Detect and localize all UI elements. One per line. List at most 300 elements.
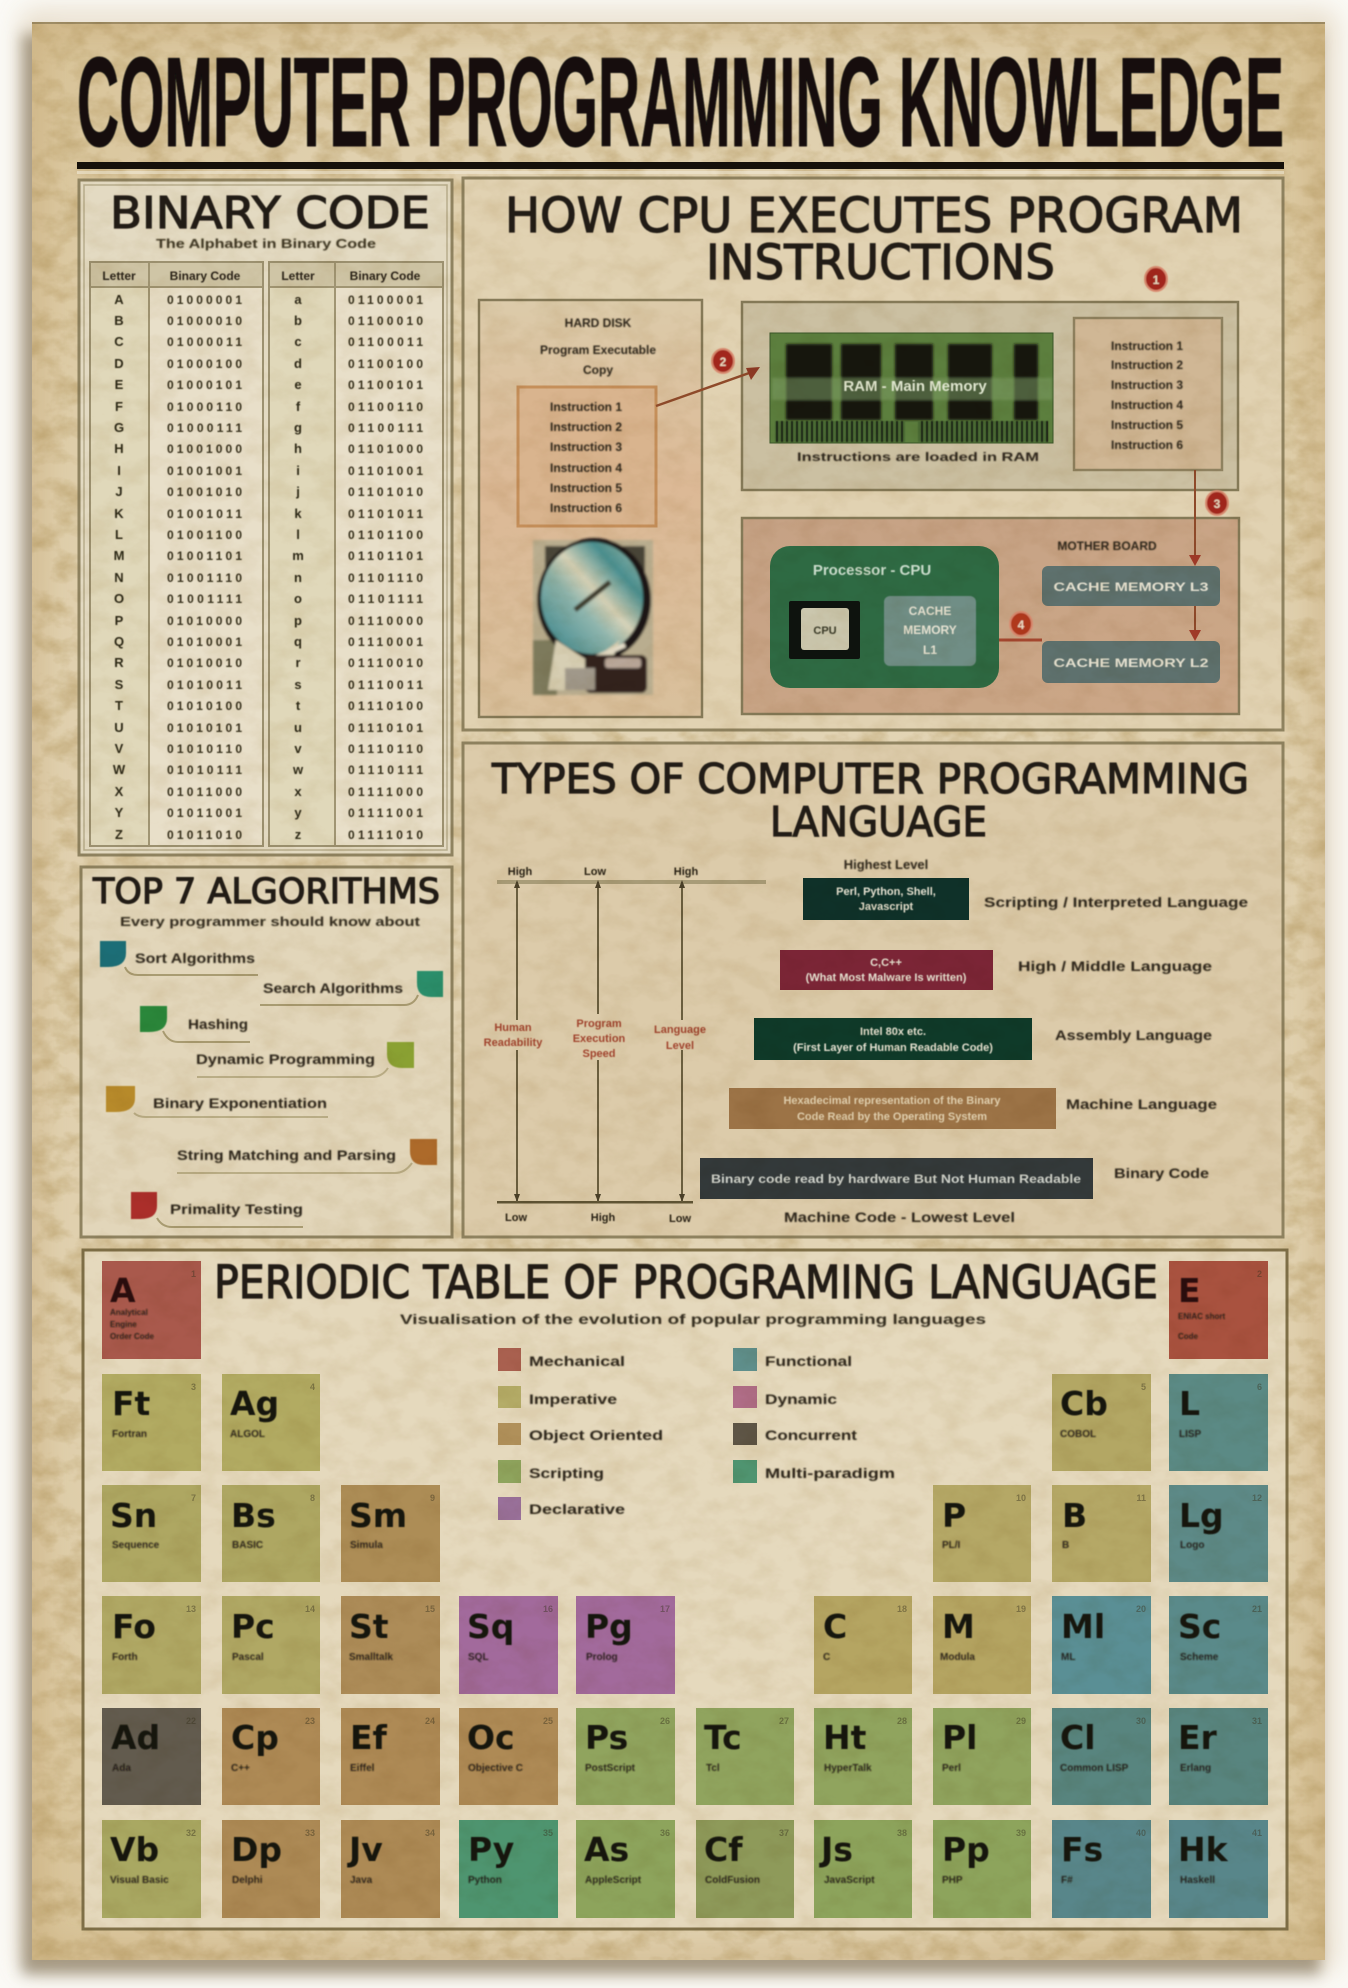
table: lowercase letters: 01100100 [348, 357, 423, 371]
element Cl: 30 [1136, 1716, 1146, 1726]
bar: assembly language: Intel 80x etc. [860, 1026, 926, 1038]
element L: 6 [1257, 1382, 1262, 1392]
bar: binary code: Binary code read by hardware But Not Human Readable [711, 1172, 1081, 1186]
table: uppercase letters: W [113, 762, 126, 777]
element A: 1 [191, 1269, 196, 1279]
table: uppercase letters: Binary Code [170, 269, 241, 283]
table: lowercase letters: 01110111 [348, 763, 423, 777]
processor block: Processor - CPU [813, 562, 931, 579]
element Oc: Oc [467, 1718, 515, 1757]
label: highest level: Highest Level [844, 857, 928, 872]
table: lowercase letters: i [296, 463, 300, 478]
element Ml [1052, 1596, 1151, 1694]
table: uppercase letters: 01010100 [167, 699, 242, 713]
element E: E [1178, 1271, 1201, 1310]
table: lowercase letters: Binary Code [350, 269, 421, 283]
table: uppercase letters: 01011000 [167, 785, 242, 799]
element Sq: 16 [543, 1604, 553, 1614]
hard disk labels [540, 316, 656, 377]
table: lowercase letters: 01100101 [348, 378, 423, 392]
table: uppercase letters: 01010111 [167, 763, 242, 777]
table: uppercase letters: O [114, 591, 124, 606]
table: lowercase letters: 01111000 [348, 785, 423, 799]
element Ht [814, 1708, 912, 1805]
axis label: language level: Language [654, 1024, 706, 1036]
element Tc [696, 1708, 794, 1805]
program instruction list: Instruction 6 [550, 501, 622, 515]
table: lowercase letters: 01100010 [348, 314, 423, 328]
heading: how CPU executes: HOW CPU EXECUTES PROGRAM [505, 188, 1243, 244]
table: uppercase letters: D [114, 356, 124, 371]
table: uppercase letters: P [115, 613, 124, 628]
element Cp [222, 1708, 320, 1805]
legend [498, 1348, 895, 1520]
element Jv [341, 1820, 440, 1918]
element Cl: Common LISP [1060, 1763, 1129, 1774]
element Cp: Cp [231, 1718, 279, 1757]
table: uppercase letters: 01011001 [167, 806, 242, 820]
element L: LISP [1179, 1429, 1202, 1440]
bar: binary code [700, 1158, 1209, 1199]
hard disk labels: Program Executable [540, 343, 656, 357]
element Py: 35 [543, 1828, 553, 1838]
element Pp [933, 1820, 1031, 1918]
table: uppercase letters: 01010011 [167, 678, 242, 692]
element As: 36 [660, 1828, 670, 1838]
element A: A [110, 1271, 136, 1310]
bar: assembly language [754, 1018, 1212, 1060]
motherboard label: MOTHER BOARD [1057, 539, 1157, 553]
element Jv: Java [350, 1875, 373, 1886]
element B: B [1062, 1540, 1069, 1551]
axes chart: Low [584, 866, 606, 878]
axes chart [484, 866, 766, 1225]
element A: Order Code [110, 1332, 155, 1341]
axes chart: Low [669, 1213, 691, 1225]
table: uppercase letters: 01001011 [167, 507, 242, 521]
element C: C [823, 1607, 847, 1646]
axis label: program execution speed: Execution [573, 1033, 626, 1045]
algorithm 3: Hashing [188, 1016, 248, 1032]
element As: As [584, 1830, 629, 1869]
element Jv: 34 [425, 1828, 435, 1838]
subheading: periodic table: Visualisation of the evolution of popular programming languages [400, 1311, 986, 1327]
element C: C [823, 1652, 830, 1663]
heading: types of programming language: LANGUAGE [770, 798, 987, 846]
table: uppercase letters: N [114, 570, 124, 585]
element B [1052, 1485, 1151, 1582]
bar: scripting language: Scripting / Interpreted Language [984, 894, 1248, 910]
element P [933, 1485, 1031, 1582]
element Cf [696, 1820, 794, 1918]
element E: Code [1178, 1332, 1199, 1341]
heading: types of programming language: TYPES OF COMPUTER PROGRAMMING [491, 755, 1249, 803]
step badge 4 [1010, 612, 1032, 636]
element Ht: HyperTalk [824, 1763, 872, 1774]
heading: periodic table: PERIODIC TABLE OF PROGRAMING LANGUAGE [214, 1256, 1158, 1309]
element Ad: Ada [112, 1763, 131, 1774]
element Fo: Fo [112, 1607, 156, 1646]
cache memory L1: MEMORY [903, 623, 957, 637]
element Ft: Fortran [112, 1429, 147, 1440]
element Sm: Sm [349, 1496, 407, 1535]
table: lowercase letters: w [292, 762, 304, 777]
table: uppercase letters: L [115, 527, 123, 542]
table: uppercase letters: 01010010 [167, 656, 242, 670]
table: uppercase letters: 01001010 [167, 485, 242, 499]
element Fo: Forth [112, 1652, 138, 1663]
element Vb [102, 1820, 201, 1918]
icon: RAM module: RAM - Main Memory [843, 378, 987, 395]
axes chart: High [508, 866, 532, 878]
table: lowercase letters: c [294, 334, 302, 349]
element Ef: Ef [350, 1718, 388, 1757]
RAM instruction list [1074, 318, 1222, 470]
bar: machine language: Code Read by the Operating System [797, 1111, 987, 1123]
cache memory L3 [1042, 566, 1220, 606]
element Jv: Jv [347, 1830, 383, 1869]
table: uppercase letters: X [115, 784, 124, 799]
element Fs [1052, 1820, 1151, 1918]
table: lowercase letters: v [294, 741, 302, 756]
table: lowercase letters: x [294, 784, 302, 799]
table: uppercase letters: 01000100 [167, 357, 242, 371]
table: uppercase letters: 01001001 [167, 464, 242, 478]
algorithm 4 [196, 1042, 414, 1077]
legend: Dynamic [765, 1391, 837, 1407]
panel: binary code [79, 180, 452, 855]
RAM instruction list: Instruction 4 [1111, 398, 1183, 412]
element E: 2 [1257, 1269, 1262, 1279]
bar: machine language: Machine Language [1066, 1096, 1217, 1112]
element Pg: 17 [660, 1604, 670, 1614]
element Bs: 8 [310, 1493, 315, 1503]
axis label: human readability: Human [494, 1022, 532, 1034]
element Sc: Scheme [1180, 1652, 1219, 1663]
table: uppercase letters: 01010001 [167, 635, 242, 649]
element Ag: Ag [230, 1384, 279, 1423]
element M: 19 [1016, 1604, 1026, 1614]
element Ps [576, 1708, 675, 1805]
table: lowercase letters: 01110010 [348, 656, 423, 670]
element Oc: Objective C [468, 1763, 523, 1774]
element M: M [942, 1607, 975, 1646]
hard disk labels: HARD DISK [565, 316, 632, 330]
element Ft: 3 [191, 1382, 196, 1392]
element Js: JavaScript [824, 1875, 875, 1886]
element E: ENIAC short [1178, 1312, 1225, 1321]
element Ml: ML [1061, 1652, 1075, 1663]
element Oc: 25 [543, 1716, 553, 1726]
algorithm 5: Binary Exponentiation [153, 1095, 327, 1111]
subheading: top 7 algorithms: Every programmer should know about [120, 914, 421, 929]
cache memory L1: L1 [923, 643, 937, 657]
element M: Modula [940, 1652, 975, 1663]
element Tc: Tc [704, 1718, 742, 1757]
hard disk labels: Copy [583, 363, 613, 377]
element St: 15 [425, 1604, 435, 1614]
element Ag [222, 1374, 320, 1471]
icon: CPU chip [789, 601, 860, 659]
table: lowercase letters: m [292, 548, 304, 563]
element C [814, 1596, 912, 1694]
cache memory L2 [1042, 641, 1220, 683]
element Js: 38 [897, 1828, 907, 1838]
element C: 18 [897, 1604, 907, 1614]
table: lowercase letters: 01101000 [348, 442, 423, 456]
table: uppercase letters: Y [115, 805, 124, 820]
motherboard box [742, 518, 1239, 714]
table: uppercase letters: 01010000 [167, 614, 242, 628]
element Ps: PostScript [585, 1763, 636, 1774]
element St: Smalltalk [349, 1652, 393, 1663]
element Ps: 26 [660, 1716, 670, 1726]
heading: how CPU executes [505, 188, 1243, 291]
bar: assembly language: (First Layer of Human Readable Code) [793, 1042, 993, 1054]
element Fs: 40 [1136, 1828, 1146, 1838]
element Hk: Haskell [1180, 1875, 1215, 1886]
table: uppercase letters: Letter [102, 269, 136, 283]
algorithm 7 [131, 1192, 303, 1227]
element Sc [1169, 1596, 1268, 1694]
element Hk: 41 [1252, 1828, 1262, 1838]
legend: Functional [765, 1353, 852, 1369]
icon: RAM module [770, 333, 1053, 443]
legend: Multi-paradigm [765, 1465, 895, 1481]
element Js: Js [819, 1830, 853, 1869]
RAM box [742, 302, 1238, 490]
panel: top 7 algorithms [81, 867, 452, 1237]
table: uppercase letters: 01001100 [167, 528, 242, 542]
element Py: Python [468, 1875, 502, 1886]
table: lowercase letters: b [294, 313, 302, 328]
table: lowercase letters: k [294, 506, 302, 521]
element Vb: Visual Basic [110, 1875, 169, 1886]
element Pl [933, 1708, 1031, 1805]
algorithm 4: Dynamic Programming [196, 1051, 375, 1067]
element Sm: 9 [430, 1493, 435, 1503]
element Ad [102, 1708, 201, 1805]
table: lowercase letters: 01101110 [348, 571, 423, 585]
element Cb: Cb [1060, 1384, 1108, 1423]
bar: scripting language: Javascript [859, 901, 914, 913]
heading: how CPU executes: INSTRUCTIONS [706, 235, 1055, 291]
table: lowercase letters [269, 262, 443, 846]
element Sq [459, 1596, 558, 1694]
step badge 3: 3 [1214, 497, 1221, 511]
arrow: RAM to L3 [1189, 470, 1201, 566]
heading: types of programming language [491, 755, 1249, 846]
table: lowercase letters: o [294, 591, 302, 606]
element Er: Erlang [1180, 1763, 1211, 1774]
subheading: binary code: The Alphabet in Binary Code [156, 236, 376, 251]
bar: machine language: Hexadecimal representation of the Binary [783, 1095, 1001, 1107]
table: lowercase letters: 01101001 [348, 464, 423, 478]
legend: Concurrent [765, 1427, 857, 1443]
table: lowercase letters: 01100110 [348, 400, 423, 414]
element Fs: F# [1061, 1875, 1073, 1886]
element P: P [942, 1496, 966, 1535]
element Pl: 29 [1016, 1716, 1026, 1726]
table: lowercase letters: a [294, 292, 302, 307]
table: lowercase letters: e [294, 377, 302, 392]
axes chart: Low [505, 1212, 527, 1224]
table: uppercase letters: I [117, 463, 121, 478]
element Pl: Pl [942, 1718, 978, 1757]
table: uppercase letters: 01000001 [167, 293, 242, 307]
axis label: program execution speed: Speed [582, 1048, 616, 1060]
table: lowercase letters: s [294, 677, 302, 692]
element Ag: 4 [310, 1382, 315, 1392]
RAM instruction list: Instruction 6 [1111, 438, 1183, 452]
label: lowest level: Machine Code - Lowest Level [784, 1209, 1015, 1225]
table: uppercase letters: 01001111 [167, 592, 242, 606]
step badge 3 [1206, 491, 1228, 515]
element Lg: Logo [1180, 1540, 1204, 1551]
table: lowercase letters: 01101101 [348, 549, 423, 563]
table: lowercase letters: l [296, 527, 300, 542]
axes chart: High [591, 1212, 615, 1224]
element A: Analytical [110, 1308, 148, 1317]
element Ad: Ad [111, 1718, 160, 1757]
element Ad: 22 [186, 1716, 196, 1726]
program instruction list: Instruction 1 [550, 400, 622, 414]
algorithm 1 [100, 941, 258, 975]
element Dp: Delphi [232, 1875, 263, 1886]
element As: AppleScript [585, 1875, 642, 1886]
table: lowercase letters: z [295, 827, 302, 842]
table: uppercase letters: 01000011 [167, 335, 242, 349]
table: uppercase letters: H [114, 441, 124, 456]
element Cp: 23 [305, 1716, 315, 1726]
program instruction list: Instruction 2 [550, 420, 622, 434]
element Cl: Cl [1060, 1718, 1096, 1757]
axis label: program execution speed: Program [576, 1018, 622, 1030]
element Cf: 37 [779, 1828, 789, 1838]
RAM caption: Instructions are loaded in RAM [797, 450, 1039, 464]
table: uppercase letters [90, 262, 263, 846]
arrow: L2 to L1 [999, 638, 1042, 642]
element Fo [102, 1596, 201, 1694]
table: lowercase letters: 01110101 [348, 721, 423, 735]
algorithm 2: Search Algorithms [263, 980, 403, 996]
element L [1169, 1374, 1268, 1471]
element Ft [102, 1374, 201, 1471]
element Cb: 5 [1141, 1382, 1146, 1392]
program instruction list: Instruction 3 [550, 440, 622, 454]
element St [341, 1596, 440, 1694]
algorithm 2 [260, 971, 443, 1005]
element Pp: 39 [1016, 1828, 1026, 1838]
RAM instruction list: Instruction 5 [1111, 418, 1183, 432]
table: uppercase letters: 01000101 [167, 378, 242, 392]
table: uppercase letters: 01000010 [167, 314, 242, 328]
step badge 2: 2 [720, 355, 727, 369]
element Ht: Ht [823, 1718, 867, 1757]
element Js [814, 1820, 912, 1918]
heading: binary code: BINARY CODE [110, 188, 430, 239]
element B: 11 [1136, 1493, 1146, 1503]
table: uppercase letters: U [114, 720, 124, 735]
bar: high middle language [780, 950, 1212, 990]
icon: hard disk [533, 538, 653, 695]
table: lowercase letters: Letter [281, 269, 315, 283]
bar: assembly language: Assembly Language [1055, 1027, 1212, 1043]
table: uppercase letters: G [114, 420, 124, 435]
table: uppercase letters: 01001110 [167, 571, 242, 585]
element Py: Py [468, 1830, 514, 1869]
panel: types of programming language [463, 743, 1283, 1237]
element Vb: 32 [186, 1828, 196, 1838]
element Sq: Sq [467, 1607, 514, 1646]
element Py [459, 1820, 558, 1918]
table: lowercase letters: 01110100 [348, 699, 423, 713]
element Sc: 21 [1252, 1604, 1262, 1614]
element Ht: 28 [897, 1716, 907, 1726]
element Ef: 24 [425, 1716, 435, 1726]
element Hk: Hk [1178, 1830, 1229, 1869]
table: uppercase letters: V [115, 741, 124, 756]
table: lowercase letters: r [295, 655, 301, 670]
step badge 4: 4 [1018, 618, 1025, 632]
table: lowercase letters: 01110000 [348, 614, 423, 628]
element Sc: Sc [1178, 1607, 1221, 1646]
program instruction list [518, 387, 656, 526]
element E [1169, 1261, 1268, 1359]
program instruction list: Instruction 5 [550, 481, 622, 495]
element Pc: Pc [231, 1607, 275, 1646]
legend: Imperative [529, 1391, 617, 1407]
bar: high middle language: C,C++ [870, 957, 902, 969]
table: lowercase letters: 01111010 [348, 828, 423, 842]
table: uppercase letters: M [114, 548, 124, 563]
legend: Declarative [529, 1501, 625, 1517]
element Cp: C++ [231, 1763, 250, 1774]
table: uppercase letters: Z [115, 827, 123, 842]
element Dp: Dp [231, 1830, 282, 1869]
arrow: disk to RAM [656, 367, 760, 406]
table: uppercase letters: 01010101 [167, 721, 242, 735]
element Pc [222, 1596, 320, 1694]
algorithm 5 [106, 1086, 328, 1117]
algorithm 6 [177, 1139, 437, 1173]
element Dp [222, 1820, 320, 1918]
algorithm 7: Primality Testing [170, 1201, 303, 1217]
element Fo: 13 [186, 1604, 196, 1614]
cache memory L1 [884, 596, 976, 666]
cache memory L2: CACHE MEMORY L2 [1054, 656, 1209, 670]
element Ft: Ft [112, 1384, 151, 1423]
element Bs: BASIC [232, 1540, 263, 1551]
element Fs: Fs [1061, 1830, 1103, 1869]
table: lowercase letters: 01101010 [348, 485, 423, 499]
element Cb [1052, 1374, 1151, 1471]
element As [576, 1820, 675, 1918]
table: lowercase letters: 01110011 [348, 678, 423, 692]
table: uppercase letters: 01011010 [167, 828, 242, 842]
element Bs [222, 1485, 320, 1582]
title rule [77, 162, 1284, 174]
step badge 1 [1145, 267, 1167, 291]
element Sn [102, 1485, 201, 1582]
element Er: Er [1178, 1718, 1218, 1757]
table: lowercase letters: h [294, 441, 302, 456]
axis label: language level: Level [666, 1040, 694, 1052]
table: lowercase letters: g [294, 420, 302, 435]
table: uppercase letters: 01000111 [167, 421, 242, 435]
table: uppercase letters: S [115, 677, 124, 692]
table: lowercase letters: t [296, 698, 301, 713]
